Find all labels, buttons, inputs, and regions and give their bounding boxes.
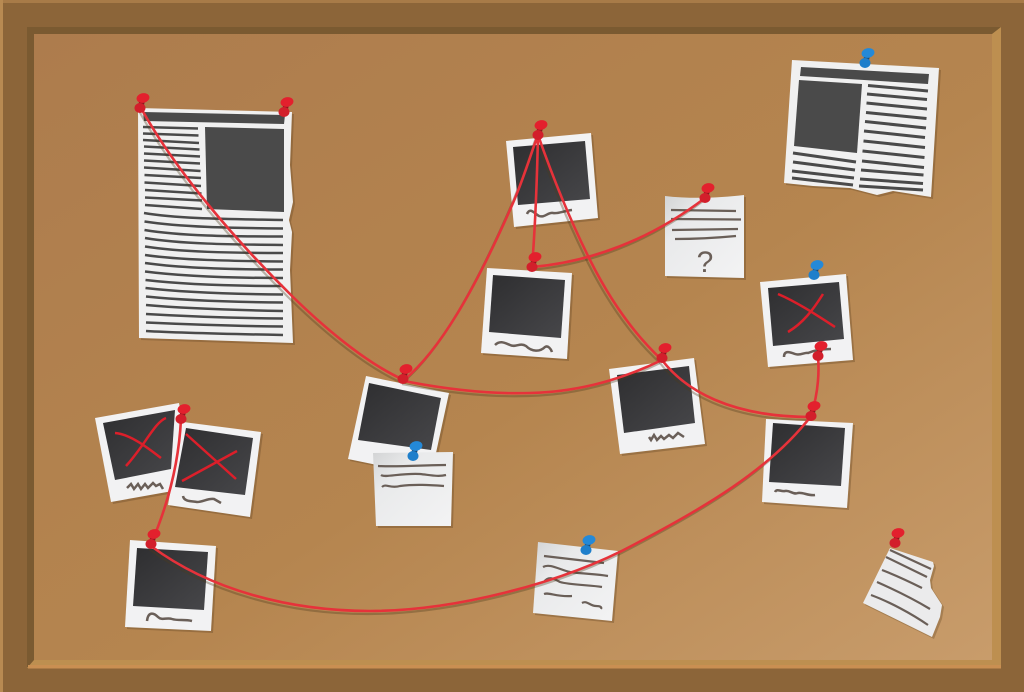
photo: top centre [506, 133, 600, 229]
photo: centre [481, 268, 574, 361]
photo: bottom left [125, 540, 218, 633]
red strings [141, 108, 819, 611]
sticky note: bottom centre [533, 542, 620, 623]
photo: lower right [762, 419, 855, 510]
photo: crossed out, overlapping [168, 422, 263, 519]
sticky note: three lines [373, 452, 455, 528]
newspaper: large [138, 108, 295, 345]
photo: crossed out, right [760, 274, 855, 369]
photo: right centre [609, 358, 707, 456]
push pins [134, 47, 905, 555]
string shadows [139, 111, 809, 614]
photo: lower centre left [348, 376, 451, 478]
torn note: bottom right [863, 548, 944, 639]
sticky note: question mark [665, 195, 746, 280]
photo: crossed out, left [95, 403, 197, 504]
sticky note: question mark: ? [697, 246, 713, 279]
newspaper: small [784, 60, 941, 199]
